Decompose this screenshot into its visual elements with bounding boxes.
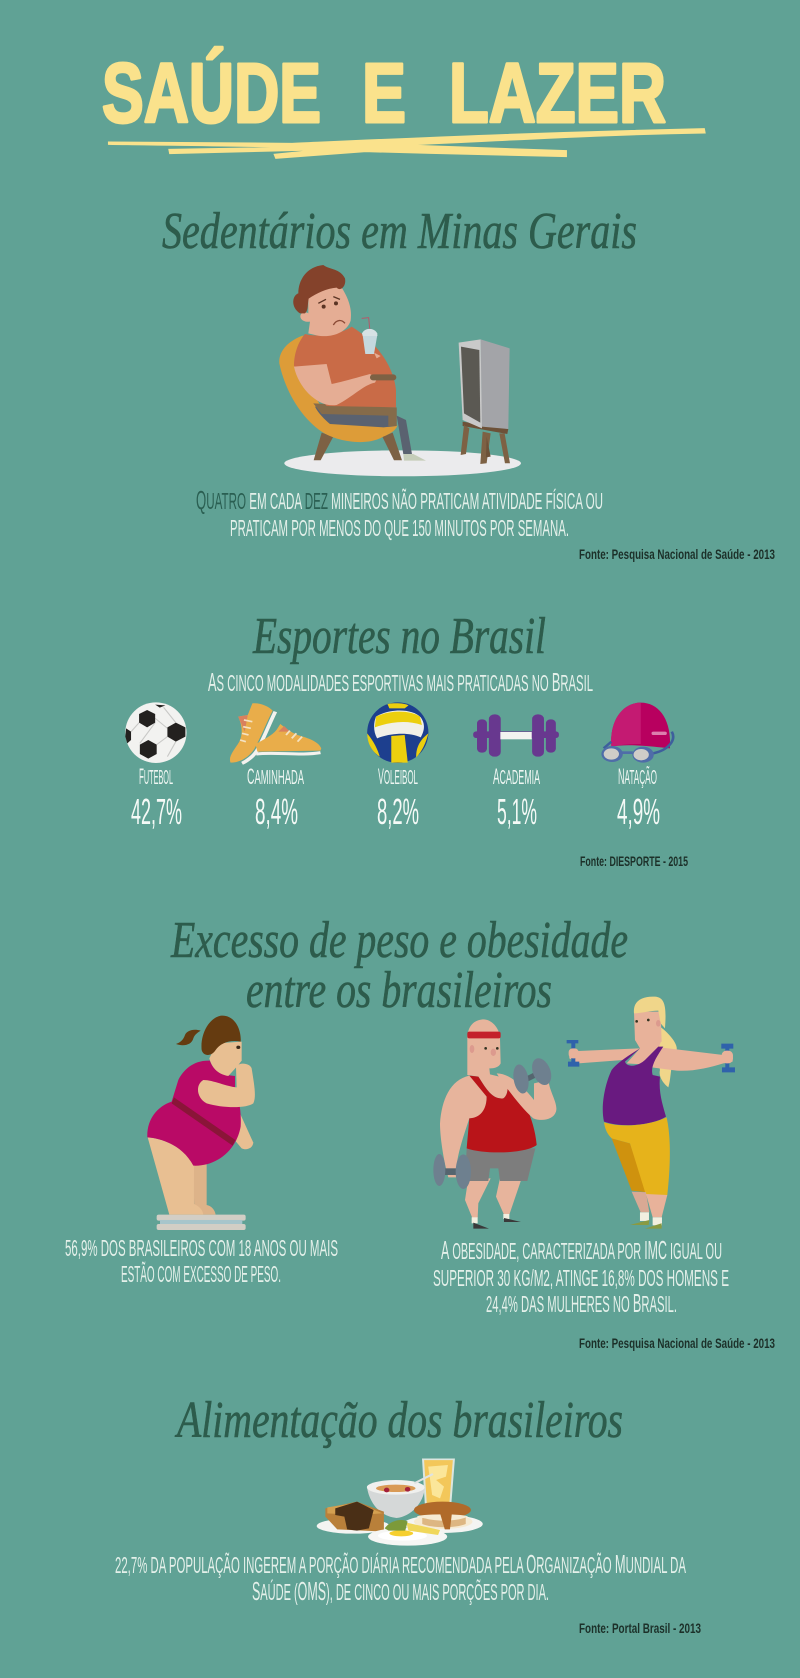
text block: 24,4% DAS MULHERES NO BRASIL. [486, 1288, 677, 1318]
percentages: 8,2% [377, 791, 419, 832]
icon: dumbbell [473, 714, 559, 757]
panel: esportes [125, 608, 688, 869]
man with dumbbells [433, 1019, 556, 1229]
panel: sedentários [162, 203, 775, 562]
percentages: 8,4% [255, 791, 298, 832]
icon: swim cap and goggles [601, 703, 673, 763]
source: Fonte: Portal Brasil - 2013 [579, 1620, 701, 1636]
labels: ACADEMIA [493, 764, 540, 789]
title: SAÚDE [102, 46, 321, 140]
text block [65, 1235, 338, 1287]
text block [433, 1235, 729, 1318]
title [102, 46, 666, 140]
percentages: 5,1% [497, 791, 537, 832]
heading: entre os brasileiros [246, 962, 552, 1019]
icon: sneakers [230, 703, 321, 763]
title: E [362, 46, 406, 140]
text block: SAÚDE (OMS), DE CINCO OU MAIS PORÇÕES POR DIA. [252, 1576, 549, 1606]
percentages [131, 791, 660, 832]
icons row [125, 702, 673, 763]
percentages: 42,7% [131, 791, 182, 832]
text block: ESTÃO COM EXCESSO DE PESO. [121, 1261, 281, 1287]
panel: esportes: NATAÇÃO [618, 764, 657, 789]
illustration: food plates [317, 1459, 483, 1546]
heading: Excesso de peso e obesidade [170, 912, 628, 969]
heading: Alimentação dos brasileiros [175, 1392, 623, 1449]
panel: alimentação [115, 1392, 701, 1636]
title underline brush stroke [109, 129, 705, 158]
labels: VOLEIBOL [378, 764, 418, 789]
woman with dumbbells [567, 997, 735, 1229]
heading: Sedentários em Minas Gerais [162, 203, 637, 260]
labels [139, 764, 657, 789]
illustration: woman on scale [147, 1016, 255, 1230]
icon: volleyball [367, 702, 428, 763]
panel: excesso de peso: 56,9% DOS BRASILEIROS COM 18 ANOS OU MAIS [65, 1235, 338, 1261]
heading [170, 912, 628, 1019]
illustration: man on chair watching TV [279, 265, 521, 476]
text block [196, 485, 603, 541]
title: LAZER [449, 46, 666, 140]
labels: CAMINHADA [247, 764, 304, 789]
labels: FUTEBOL [139, 764, 173, 789]
icon: soccer ball [125, 702, 187, 763]
text block [115, 1549, 686, 1606]
percentages: 4,9% [617, 791, 660, 832]
heading: Esportes no Brasil [252, 608, 546, 665]
source: Fonte: DIESPORTE - 2015 [580, 853, 688, 869]
illustration: man and woman exercising [433, 997, 735, 1229]
panel: excesso de peso [65, 912, 775, 1351]
